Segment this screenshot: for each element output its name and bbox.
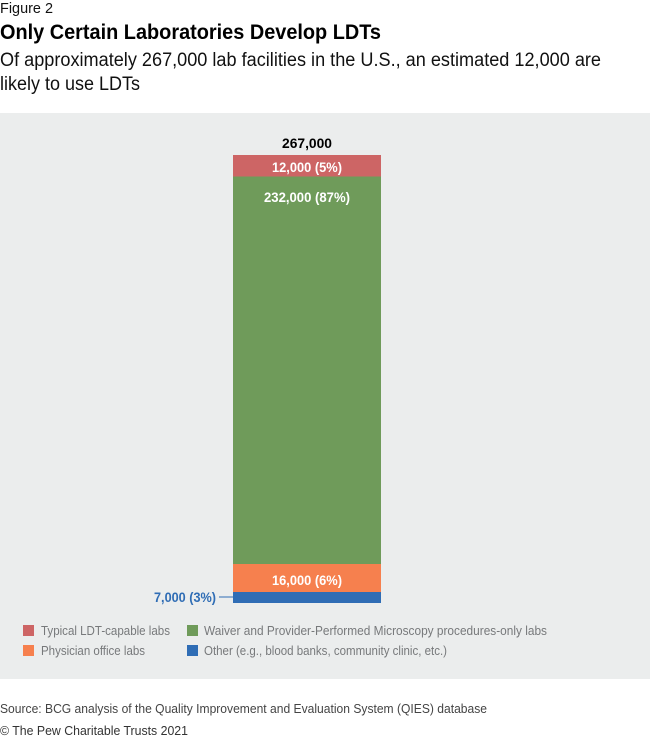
panel: chart background [0, 113, 650, 679]
segment: physician office labs [233, 564, 381, 592]
legend item: physician office labs: Physician office labs [41, 643, 145, 658]
segment: typical LDT-capable labs: 12,000 (5%) [272, 159, 342, 175]
legend item: waiver labs: Waiver and Provider-Performed Microscopy procedures-only labs [204, 623, 547, 638]
segment: physician office labs: 16,000 (6%) [272, 572, 342, 588]
legend [23, 623, 547, 658]
source note: Source: BCG analysis of the Quality Improvement and Evaluation System (QIES) database [0, 701, 487, 716]
subtitle [0, 50, 601, 95]
legend item: other: Other (e.g., blood banks, community clinic, etc.) [204, 643, 447, 658]
total label: 267,000 [282, 135, 332, 151]
title: Only Certain Laboratories Develop LDTs [0, 20, 381, 44]
subtitle: likely to use LDTs [0, 74, 140, 95]
segment: waiver and PPM labs: 232,000 (87%) [264, 189, 350, 205]
legend item: typical LDT-capable labs: Typical LDT-capable labs [41, 623, 170, 638]
segment: waiver and PPM labs [233, 176, 381, 564]
copyright: © The Pew Charitable Trusts 2021 [0, 723, 188, 738]
segment: other [154, 589, 381, 605]
figure label: Figure 2 [0, 1, 53, 17]
stacked bar chart [154, 135, 381, 605]
segment: typical LDT-capable labs [233, 155, 381, 176]
subtitle: Of approximately 267,000 lab facilities in the U.S., an estimated 12,000 are [0, 50, 601, 71]
segment: other: 7,000 (3%) [154, 589, 216, 605]
